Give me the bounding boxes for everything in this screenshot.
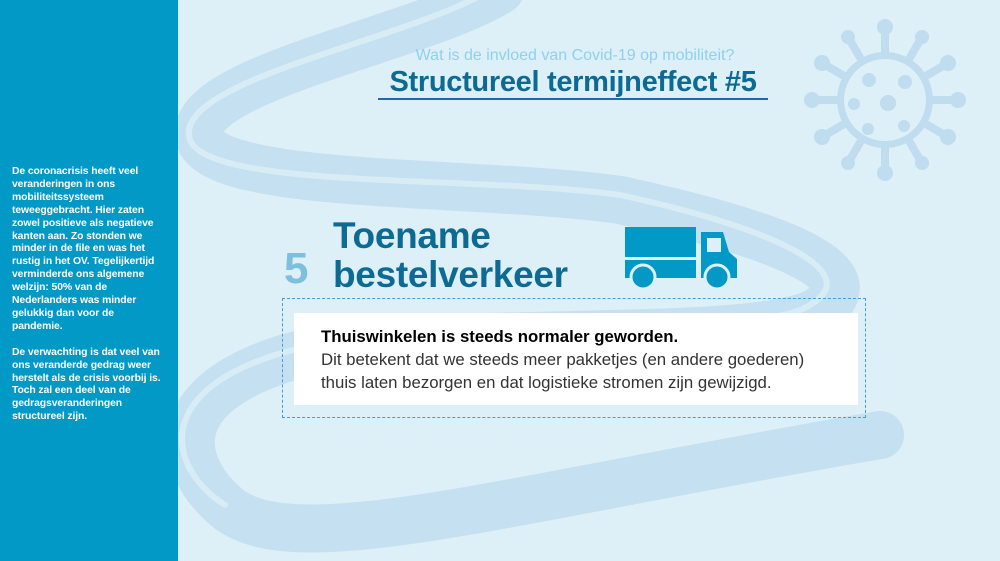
icon: truck	[625, 227, 737, 288]
sidebar	[0, 0, 178, 561]
subtitle: Wat is de invloed van Covid-19 op mobiliteit?	[416, 47, 734, 64]
heading: Toename	[333, 215, 491, 256]
callout text: Thuiswinkelen is steeds normaler geworden.	[321, 327, 678, 346]
heading	[333, 215, 568, 295]
title: Structureel termijneffect #5	[389, 66, 757, 98]
sidebar text: De coronacrisis heeft veel veranderingen in ons mobiliteitssysteem teweeggebracht. Hier zaten zowel positieve als negatieve kanten aan. Zo stonden we minder in de file en was het rustig in het OV. Tegelijkertijd verminderde ons algemene welzijn: 50% van de Nederlanders was minder gelukkig dan voor de pandemie.	[12, 166, 154, 332]
callout text	[294, 313, 858, 405]
callout box	[282, 298, 866, 418]
number 5: 5	[284, 244, 308, 293]
icon: virus	[804, 19, 966, 181]
callout text: thuis laten bezorgen en dat logistieke stromen zijn gewijzigd.	[321, 373, 772, 392]
heading: bestelverkeer	[333, 254, 568, 295]
callout text: Dit betekent dat we steeds meer pakketjes (en andere goederen)	[321, 350, 804, 369]
sidebar text	[12, 166, 160, 422]
sidebar text: De verwachting is dat veel van ons veranderde gedrag weer herstelt als de crisis voorbij is. Toch zal een deel van de gedragsveranderingen structureel zijn.	[12, 347, 160, 422]
